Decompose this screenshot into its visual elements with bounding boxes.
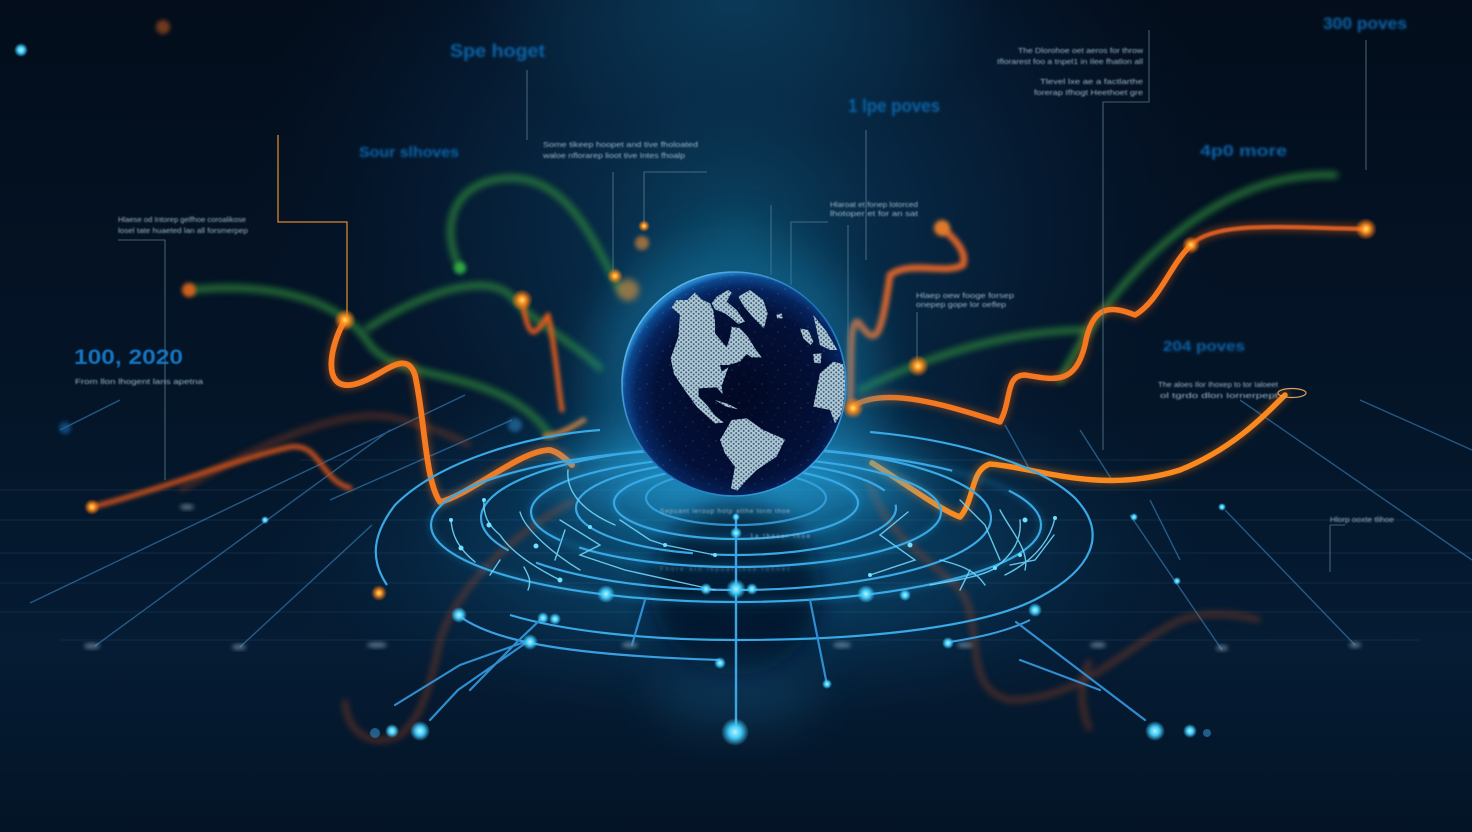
orange glow nodes [84,20,1377,601]
leader lines [118,30,1366,572]
small annotation text blocks: Hlaep oew fooge forsep [916,291,1014,300]
heading labels [74,14,1407,369]
small annotation text blocks: Hlorp ooxte tlihoe [1330,515,1394,524]
small annotation text blocks: Some tikeep hoopet and tive fholoated [543,140,698,149]
small annotation text blocks [75,46,1394,524]
ring caption text: Sepuant leroup hotp atthe lorm thoe [660,508,790,515]
cyan network nodes [14,43,1226,746]
perspective grid floor [0,395,1472,650]
heading labels: 100, 2020 [74,346,183,369]
small annotation text blocks: ol tgrdo dlon Iornerpept [1160,391,1279,400]
small annotation text blocks: lhotoper et for an sat [830,209,919,218]
small annotation text blocks: Iflorarest foo a tnpel1 in Ilee fhatlon all [997,57,1143,66]
orange trend line: above right of globe [850,228,964,400]
radial network lines [395,515,1145,732]
heading labels: 204 poves [1163,338,1245,355]
faded orange reflection curves [180,416,1260,740]
ring caption text: Fhore ato lepoat thoe ronnec [660,567,790,573]
concentric data rings [376,430,1093,660]
small annotation text blocks: From llon lhogent lans apetna [75,377,204,386]
globe [622,272,846,496]
small annotation text blocks: Hlaese od Intorep gelfhoe coroalikose [118,215,246,224]
heading labels: 300 poves [1323,14,1407,33]
heading labels: 4p0 more [1200,143,1287,160]
small annotation text blocks: waloe nflorarep lioot tive Intes fhoalp [542,151,685,160]
heading labels: Sour slhoves [359,144,459,161]
heading labels: Spe hoget [450,41,545,61]
small annotation text blocks: Tlevel lxe ae a factlarthe [1040,77,1143,86]
orange trend line: main left [331,320,572,502]
small annotation text blocks: losel tate huaeted lan all forsmerpep [118,226,248,235]
green trend lines [190,175,1335,435]
globe sphere [622,272,846,496]
orange trend line: centre left fragment [522,300,584,436]
shadow under globe [651,505,821,725]
cyan network trace nodes [449,498,1057,582]
globe back glow [546,240,926,530]
continents [671,290,846,491]
heading labels: 1 lpe poves [848,96,940,116]
grid end labels [84,504,1361,651]
ring caption text [660,508,811,573]
orange trend line: lower left [92,447,350,507]
circuit traces [451,470,1055,590]
small annotation text blocks: Hlaroat et fonep lotorced [830,200,918,209]
small annotation text blocks: forerap Ifhogt Heethoet gre [1034,88,1143,97]
orange trend line: lower right [872,388,1306,517]
orange trend line: main right [855,227,1366,422]
small annotation text blocks: onepep gope lor oeflep [916,300,1006,309]
ring glow [431,448,1041,602]
ring caption text: 1a lhesar thoe [750,534,811,540]
small annotation text blocks: The aloes Ilor Ihoxep to tor Ialoeet [1158,380,1279,389]
small annotation text blocks: The Dlorohoe oet aeros for throw [1018,46,1144,55]
